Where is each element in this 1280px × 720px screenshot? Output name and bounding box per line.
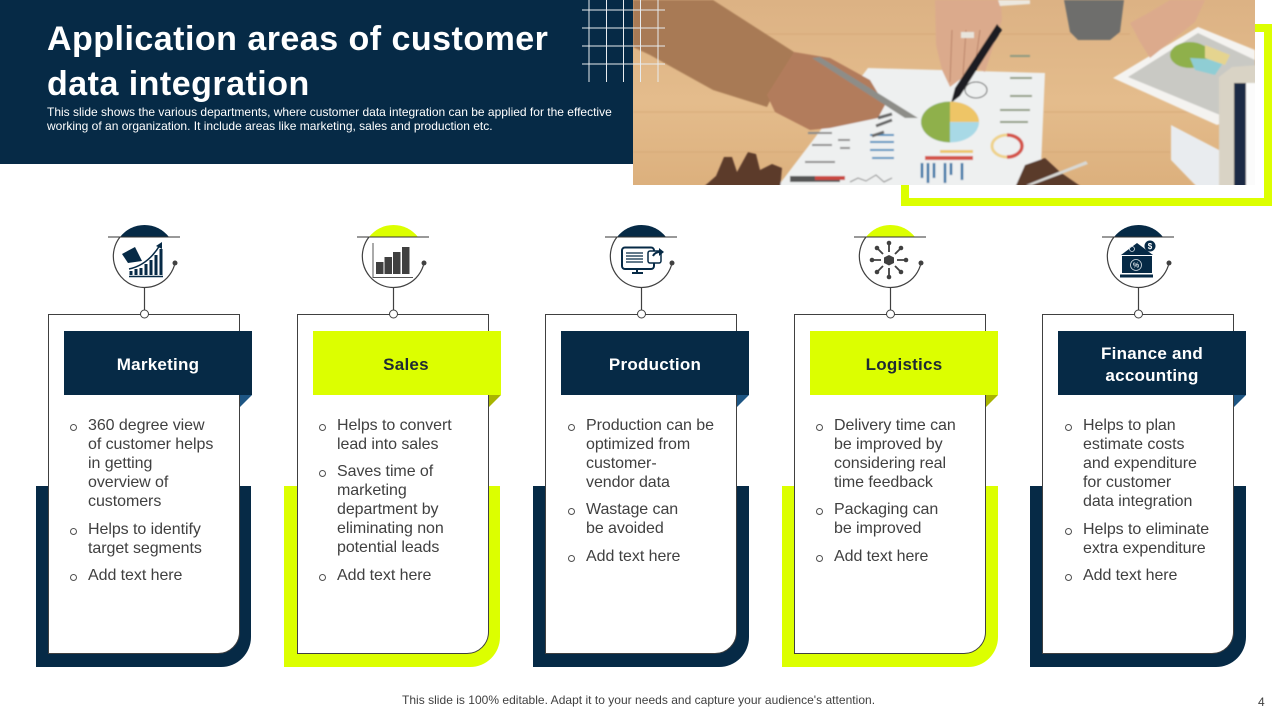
- header: Finance and accounting: accounting: [1105, 366, 1199, 385]
- title: [47, 20, 548, 103]
- header: Production: [561, 331, 749, 395]
- header fold: [986, 395, 998, 407]
- bullet: customer-: [586, 455, 657, 472]
- bullet: [834, 500, 938, 538]
- bullet: optimized from: [586, 436, 690, 453]
- bullet: [586, 416, 714, 492]
- page number: 4: [1258, 695, 1265, 709]
- header fold: [737, 395, 749, 407]
- bullet: [337, 416, 452, 454]
- bullet: [586, 500, 678, 538]
- bullet: be improved: [834, 520, 921, 537]
- bullet: Helps to plan: [1083, 417, 1176, 434]
- panel: finance and accounting: [1030, 225, 1246, 667]
- bullet: extra expenditure: [1083, 540, 1206, 557]
- bullet: target segments: [88, 540, 202, 557]
- header: Sales: Sales: [383, 355, 429, 374]
- header fold: [1234, 395, 1246, 407]
- header: Production: Production: [609, 355, 701, 374]
- bullet: Add text here: [1083, 567, 1177, 584]
- bullet: Add text here: [88, 567, 182, 584]
- bullet: be improved by: [834, 436, 943, 453]
- bullet: Production can be: [586, 417, 714, 434]
- bullet: Add text here: [586, 548, 680, 565]
- header fold: [240, 395, 252, 407]
- panel: sales: [284, 225, 501, 667]
- bullet: Add text here: [337, 567, 431, 584]
- bullet: vendor data: [586, 474, 670, 491]
- bullet: Packaging can: [834, 501, 938, 518]
- icon: bank with dollar and percent: $: [1148, 242, 1153, 251]
- subtitle: working of an organization. It include areas like marketing, sales and production etc.: [47, 119, 493, 133]
- header: Marketing: Marketing: [117, 355, 199, 374]
- bullet: Delivery time can: [834, 417, 956, 434]
- panel: marketing: [36, 225, 252, 667]
- subtitle: This slide shows the various departments, where customer data integration can be applied for the effective: [47, 105, 612, 119]
- bullet: marketing: [337, 482, 407, 499]
- bullet: be avoided: [586, 520, 664, 537]
- bullet: Add text here: [834, 548, 928, 565]
- panel: production: [533, 225, 749, 667]
- icon: monitor with share arrow: [605, 225, 677, 318]
- bullet: in getting: [88, 455, 152, 472]
- bullet: of customer helps: [88, 436, 213, 453]
- bullet: [834, 416, 956, 492]
- bullet: estimate costs: [1083, 436, 1184, 453]
- bullet: [1083, 520, 1209, 558]
- footer note: This slide is 100% editable. Adapt it to your needs and capture your audience's attention.: [402, 693, 875, 707]
- bullet: Saves time of: [337, 463, 433, 480]
- bullet: [88, 416, 213, 511]
- bullet: [88, 520, 202, 558]
- bullet: time feedback: [834, 474, 933, 491]
- bullet: [337, 462, 444, 557]
- title: Application areas of customer: [47, 20, 548, 58]
- header: Sales: [313, 331, 501, 395]
- subtitle: [47, 105, 612, 133]
- header fold: [489, 395, 501, 407]
- bullet: data integration: [1083, 493, 1192, 510]
- bullet: 360 degree view: [88, 417, 205, 434]
- title: data integration: [47, 65, 310, 103]
- bullet: [1083, 416, 1197, 511]
- panel: logistics: [782, 225, 998, 667]
- bullet: lead into sales: [337, 436, 438, 453]
- icon: bank with dollar and percent: %: [1133, 262, 1140, 270]
- bullet: for customer: [1083, 474, 1171, 491]
- lime photo frame: [901, 24, 1272, 206]
- photo: team reviewing charts on a wooden table: [633, 0, 1255, 185]
- bullet: considering real: [834, 455, 946, 472]
- header band: [0, 0, 633, 164]
- bullet: customers: [88, 493, 161, 510]
- bullet: potential leads: [337, 539, 439, 556]
- header: Logistics: [810, 331, 998, 395]
- bullet: Helps to convert: [337, 417, 452, 434]
- bullet: Wastage can: [586, 501, 678, 518]
- bullet: Helps to identify: [88, 521, 201, 538]
- header: Marketing: [64, 331, 252, 395]
- icon: distribution hub: [854, 225, 926, 318]
- header: Finance and accounting: [1058, 331, 1246, 395]
- icon: bar chart: [357, 225, 429, 318]
- bullet: eliminating non: [337, 520, 444, 537]
- icon: bank with dollar and percent: [1102, 225, 1174, 318]
- icon: megaphone and growth bars: [108, 225, 180, 318]
- header: Finance and accounting: Finance and: [1101, 344, 1203, 363]
- bullet: department by: [337, 501, 439, 518]
- bullet: overview of: [88, 474, 168, 491]
- bullet: Helps to eliminate: [1083, 521, 1209, 538]
- header: Logistics: Logistics: [866, 355, 942, 374]
- bullet: and expenditure: [1083, 455, 1197, 472]
